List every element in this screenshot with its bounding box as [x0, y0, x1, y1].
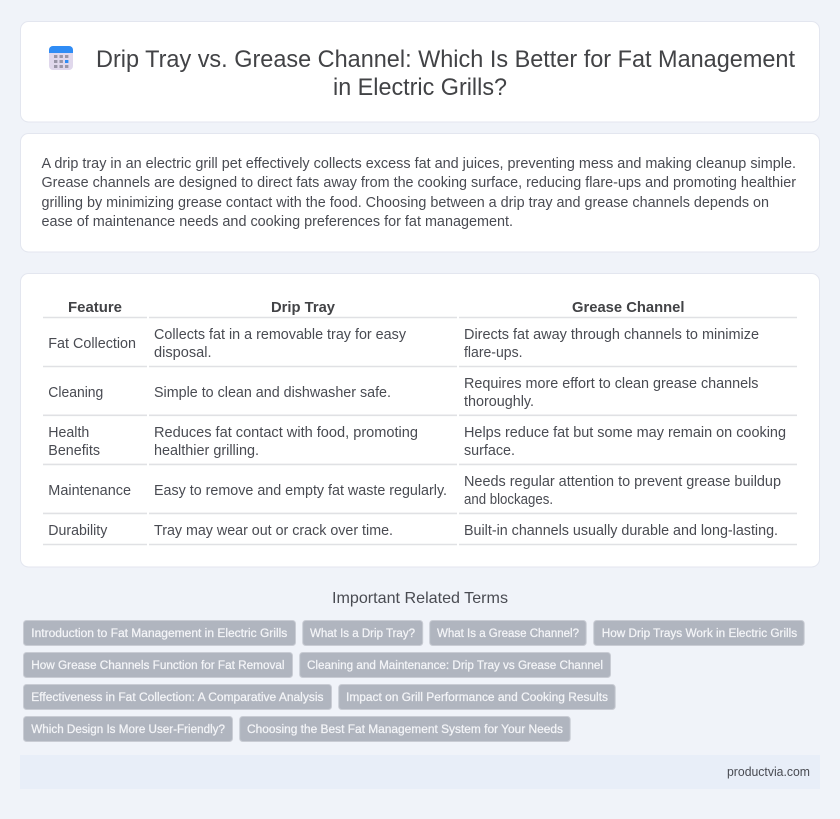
heading: in Electric Grills?: [333, 74, 507, 101]
row: cleaning: Cleaning: [48, 385, 103, 401]
row: maintenance: Easy to remove and empty fat waste regularly.: [154, 483, 447, 499]
row: cleaning: thoroughly.: [464, 394, 534, 410]
row: maintenance: Needs regular attention to prevent grease buildup: [464, 474, 781, 490]
row: maintenance: and blockages.: [464, 492, 553, 508]
row: health benefits: Health: [48, 425, 89, 441]
row: fat collection: Collects fat in a removable tray for easy: [154, 327, 407, 343]
intro panel: [20, 134, 820, 252]
row: health benefits: [48, 425, 786, 459]
row: health benefits: Benefits: [48, 443, 100, 459]
table header: Feature: [68, 299, 122, 316]
row: maintenance: [48, 474, 781, 508]
related terms tags: What Is a Drip Tray?: [310, 626, 415, 640]
row: cleaning: Requires more effort to clean grease channels: [464, 376, 758, 392]
row: maintenance: Maintenance: [48, 483, 131, 499]
related terms tags: Cleaning and Maintenance: Drip Tray vs Grease Channel: [307, 658, 603, 672]
related terms tags: What Is a Grease Channel?: [437, 626, 579, 640]
intro text: A drip tray in an electric grill pet effectively collects excess fat and juices, preventing mess and making cleanup simple.: [42, 156, 796, 172]
related terms tags: Introduction to Fat Management in Electric Grills: [31, 626, 287, 640]
related terms tags: Which Design Is More User-Friendly?: [31, 722, 225, 736]
row: health benefits: healthier grilling.: [154, 443, 259, 459]
row: durability: [48, 523, 778, 539]
intro text: grilling by minimizing grease contact with the food. Choosing between a drip tray and grease channels depends on: [42, 195, 769, 211]
table header: Grease Channel: [572, 299, 684, 316]
comparison table panel: [20, 274, 820, 567]
icon: calendar: [49, 46, 73, 70]
table header: Drip Tray: [271, 299, 336, 316]
related terms heading: Important Related Terms: [332, 590, 508, 607]
intro text: ease of maintenance needs and cooking preferences for fat management.: [42, 214, 513, 230]
related terms tags: Impact on Grill Performance and Cooking Results: [346, 690, 608, 704]
intro text: Grease channels are designed to direct fats away from the cooking surface, reducing flare-ups and promoting healthier: [42, 175, 796, 191]
table header: [68, 299, 684, 316]
heading: Drip Tray vs. Grease Channel: Which Is Better for Fat Management: [96, 46, 795, 73]
row: fat collection: disposal.: [154, 345, 212, 361]
row: durability: Durability: [48, 523, 108, 539]
row: health benefits: surface.: [464, 443, 515, 459]
heading: [96, 46, 795, 101]
related terms tags: Effectiveness in Fat Collection: A Comparative Analysis: [31, 690, 324, 704]
row: durability: Built-in channels usually durable and long-lasting.: [464, 523, 778, 539]
footer: [20, 755, 820, 789]
intro text: [42, 156, 796, 230]
footer: productvia.com: [727, 765, 810, 779]
row: fat collection: [48, 327, 759, 361]
row: cleaning: [48, 376, 759, 410]
related terms tags: [24, 620, 804, 742]
row: cleaning: Simple to clean and dishwasher safe.: [154, 385, 391, 401]
title card: [20, 22, 820, 122]
row: fat collection: Fat Collection: [48, 336, 136, 352]
related terms tags: How Drip Trays Work in Electric Grills: [602, 626, 797, 640]
row: health benefits: Reduces fat contact with food, promoting: [154, 425, 418, 441]
related terms tags: How Grease Channels Function for Fat Removal: [31, 658, 284, 672]
row: fat collection: Directs fat away through channels to minimize: [464, 327, 759, 343]
related terms tags: Choosing the Best Fat Management System for Your Needs: [247, 722, 563, 736]
row: health benefits: Helps reduce fat but some may remain on cooking: [464, 425, 786, 441]
row: fat collection: flare-ups.: [464, 345, 522, 361]
row: durability: Tray may wear out or crack over time.: [154, 523, 393, 539]
